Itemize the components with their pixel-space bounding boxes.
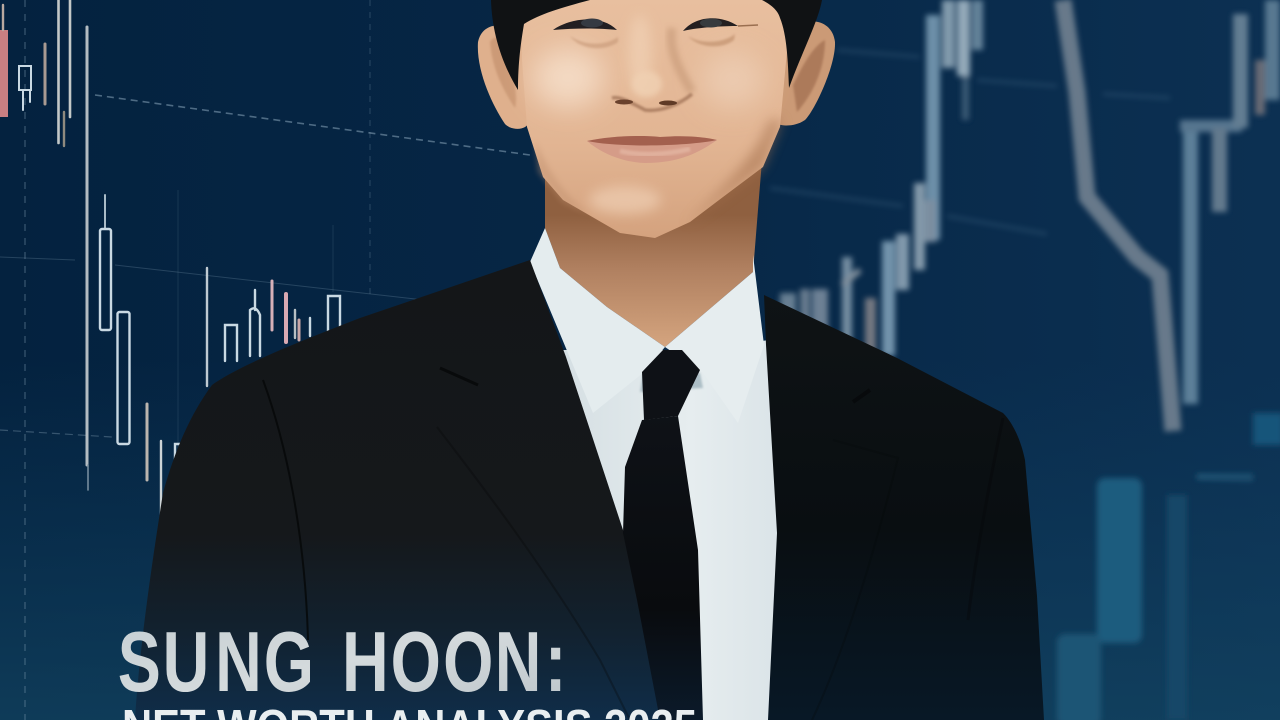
suit jacket: left side — [135, 260, 695, 720]
nose — [612, 71, 692, 132]
hair — [491, 0, 590, 90]
neck — [545, 160, 762, 347]
candlestick chart: left, sharp — [0, 0, 340, 517]
portrait: man in black suit — [135, 0, 1044, 720]
necktie — [623, 350, 703, 720]
suit details: lapels and seams — [263, 368, 1003, 720]
eye: right — [683, 18, 758, 46]
shirt collar: right — [665, 255, 764, 423]
mouth: smile — [587, 136, 717, 163]
grid lines: left sharp chart — [0, 0, 530, 720]
candlestick chart: right, out of focus — [780, 0, 1280, 431]
title line 1: SUNG HOON: — [118, 614, 566, 709]
blurred horizontal grid lines: right — [770, 50, 1253, 480]
title — [118, 614, 697, 720]
shirt collar: left — [530, 228, 665, 413]
blurred volume bars: lower right — [1057, 413, 1280, 720]
ear: left — [478, 25, 528, 129]
eye: left — [553, 18, 618, 48]
suit jacket: right side — [764, 295, 1044, 720]
face — [491, 0, 822, 238]
ear: right — [778, 21, 835, 125]
white shirt — [530, 228, 778, 720]
